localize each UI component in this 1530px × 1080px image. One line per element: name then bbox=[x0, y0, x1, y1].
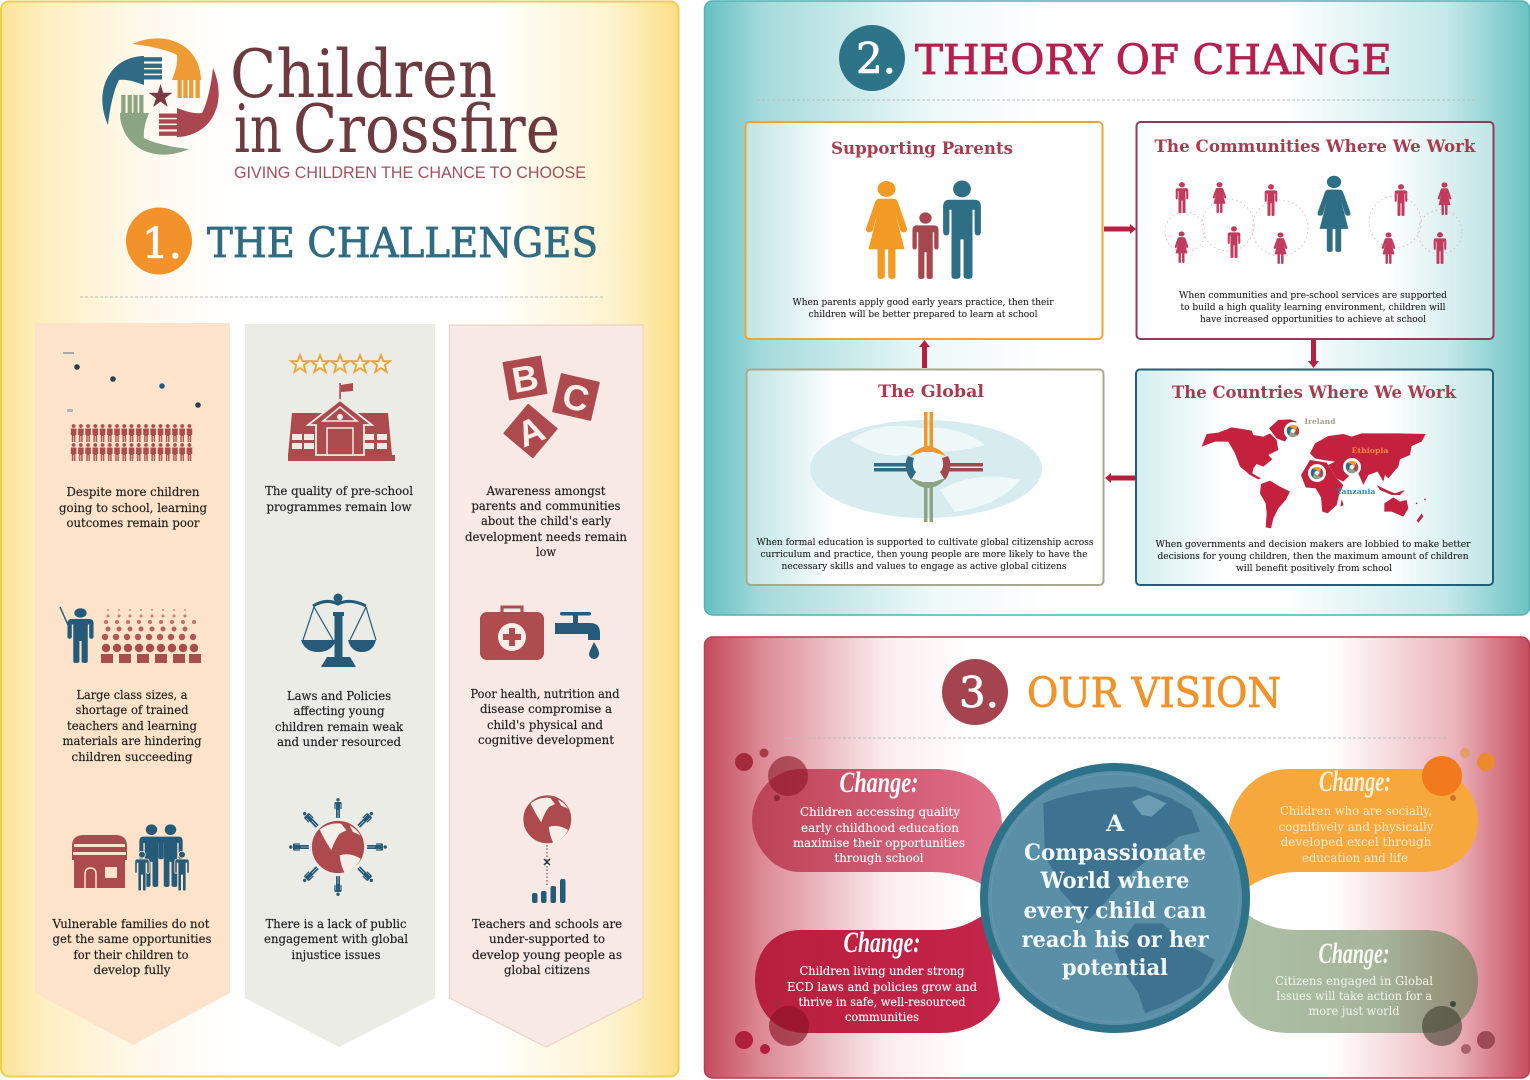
text: awareness: Awareness amongst bbox=[486, 484, 606, 498]
text: learning outcomes: Despite more children bbox=[66, 485, 200, 499]
icon: five stars bbox=[291, 355, 390, 372]
box: communities bbox=[1136, 122, 1494, 339]
column: pink challenges bbox=[450, 325, 643, 1047]
world map with country labels: Tanzania bbox=[1336, 487, 1376, 496]
text: health: disease compromise a bbox=[480, 702, 612, 716]
text: class sizes: Large class sizes, a bbox=[76, 688, 188, 702]
change bubble: child development: Change: bbox=[1319, 765, 1391, 798]
central vision globe: every child can bbox=[1024, 898, 1206, 924]
text: awareness: parents and communities bbox=[472, 499, 620, 513]
change bubble: laws and policies: Change: bbox=[844, 926, 920, 959]
heading: 3. our vision: OUR VISION bbox=[1027, 669, 1281, 717]
icon: school building bbox=[288, 383, 395, 461]
box: countries: decisions for young children, then the maximum amount of children bbox=[1158, 551, 1468, 562]
arrow: communities to countries bbox=[1308, 340, 1319, 368]
world map with country labels: Ethiopia bbox=[1352, 446, 1389, 455]
text: vulnerable families: get the same opportunities bbox=[52, 932, 212, 946]
text: awareness: development needs remain bbox=[465, 530, 627, 544]
column: grey challenges bbox=[245, 324, 435, 1047]
change bubble: global issues: Issues will take action for a bbox=[1276, 989, 1432, 1003]
text: laws and policies: children remain weak bbox=[275, 720, 404, 734]
text: learning outcomes bbox=[59, 485, 207, 530]
arrow: parents to communities bbox=[1104, 224, 1136, 234]
text: learning outcomes: going to school, learning bbox=[59, 501, 207, 515]
logo: Children in Crossfire: in bbox=[234, 91, 282, 168]
panel: our vision bbox=[704, 637, 1530, 1078]
icon: four hands and star bbox=[102, 38, 219, 155]
icon: community network bbox=[1165, 176, 1462, 264]
central vision globe: Compassionate bbox=[1024, 840, 1206, 866]
heading: 1. the challenges: 1. bbox=[142, 219, 182, 268]
icon: crowd of children bbox=[63, 352, 201, 461]
change bubble: laws and policies: communities bbox=[845, 1010, 919, 1024]
text: learning outcomes: outcomes remain poor bbox=[66, 516, 200, 530]
icon: scales of justice bbox=[301, 594, 376, 667]
box: the global bbox=[746, 370, 1104, 585]
icon: medical kit and tap bbox=[480, 607, 600, 660]
text: awareness bbox=[465, 484, 627, 559]
heading: 3. our vision: 3. bbox=[959, 668, 999, 717]
box: communities: When communities and pre-school services are supported bbox=[1179, 290, 1447, 301]
change bubble: laws and policies bbox=[735, 914, 1000, 1054]
change bubble: early childhood education: maximise their opportunities bbox=[793, 836, 965, 850]
box: the global: curriculum and practice, then young people are more likely to have the bbox=[760, 549, 1088, 560]
text: vulnerable families: develop fully bbox=[94, 963, 171, 977]
logo: Children in Crossfire bbox=[102, 36, 586, 182]
text: health: Poor health, nutrition and bbox=[470, 687, 620, 701]
text: global citizens bbox=[472, 917, 622, 977]
world map with country labels bbox=[1202, 417, 1426, 528]
text: public engagement bbox=[264, 917, 408, 962]
text: laws and policies bbox=[275, 689, 404, 749]
icon: alphabet blocks: B bbox=[509, 356, 541, 401]
icon: alphabet blocks bbox=[502, 355, 600, 458]
change bubble: global issues: Change: bbox=[1318, 937, 1390, 970]
box: supporting parents bbox=[746, 122, 1102, 339]
heading: 1. the challenges bbox=[126, 208, 598, 274]
text: pre-school quality: programmes remain low bbox=[266, 500, 412, 514]
arrow: global to parents bbox=[919, 340, 930, 368]
icon: globe and bar chart bbox=[523, 795, 572, 903]
text: awareness: low bbox=[536, 545, 557, 559]
central vision globe bbox=[984, 767, 1246, 1029]
central vision globe: reach his or her bbox=[1022, 927, 1209, 953]
text: laws and policies: Laws and Policies bbox=[287, 689, 391, 703]
text: public engagement: There is a lack of public bbox=[266, 917, 407, 931]
icon: alphabet blocks: A bbox=[511, 408, 550, 455]
change bubble: child development: education and life bbox=[1302, 851, 1408, 865]
box: countries: When governments and decision makers are lobbied to make better bbox=[1156, 539, 1471, 550]
change bubble: laws and policies: Children living under strong bbox=[800, 964, 965, 978]
heading: 2. theory of change: THEORY OF CHANGE bbox=[915, 36, 1392, 84]
box: supporting parents: children will be better prepared to learn at school bbox=[808, 309, 1038, 320]
change bubble: child development: cognitively and physically bbox=[1278, 820, 1434, 834]
heading: 2. theory of change: 2. bbox=[856, 34, 896, 83]
central vision globe: World where bbox=[1040, 868, 1190, 894]
change bubble: laws and policies: thrive in safe, well-resourced bbox=[798, 995, 966, 1009]
icon: globe with people bbox=[289, 798, 387, 896]
text: vulnerable families bbox=[52, 917, 212, 977]
text: health: cognitive development bbox=[478, 733, 614, 747]
change bubble: child development: developed excel through bbox=[1280, 835, 1432, 849]
text: vulnerable families: Vulnerable families do not bbox=[52, 917, 210, 931]
arrow: countries to global bbox=[1105, 473, 1135, 483]
change bubble: child development: Children who are socially, bbox=[1280, 804, 1432, 818]
panel: theory of change bbox=[704, 1, 1530, 615]
change bubble: early childhood education: early childhood education bbox=[801, 821, 959, 835]
icon: alphabet blocks: C bbox=[559, 375, 593, 420]
box: the global: When formal education is supported to cultivate global citizenship across bbox=[756, 537, 1094, 548]
text: public engagement: engagement with global bbox=[264, 932, 408, 946]
text: global citizens: Teachers and schools are bbox=[472, 917, 622, 931]
heading: 3. our vision bbox=[942, 659, 1281, 725]
box: communities: have increased opportunities to achieve at school bbox=[1200, 314, 1426, 325]
change bubble: global issues bbox=[1228, 914, 1495, 1054]
box: countries: will benefit positively from school bbox=[1236, 563, 1392, 574]
text: global citizens: global citizens bbox=[504, 963, 590, 977]
icon: house and family bbox=[72, 824, 189, 891]
panel: the challenges bbox=[1, 2, 678, 1076]
text: global citizens: develop young people as bbox=[472, 948, 622, 962]
text: global citizens: under-supported to bbox=[489, 932, 605, 946]
change bubble: laws and policies: ECD laws and policies grow and bbox=[787, 980, 977, 994]
logo: Children in Crossfire: GIVING CHILDREN THE CHANCE TO CHOOSE bbox=[234, 164, 586, 182]
change bubble: global issues: more just world bbox=[1308, 1004, 1400, 1018]
icon: global hands on globe bbox=[810, 412, 1042, 522]
change bubble: child development bbox=[1228, 748, 1495, 888]
box: countries bbox=[1136, 370, 1493, 585]
text: class sizes: teachers and learning bbox=[67, 719, 197, 733]
change bubble: early childhood education: Children accessing quality bbox=[800, 805, 960, 819]
change bubble: early childhood education: through school bbox=[834, 851, 924, 865]
change bubble: global issues: Citizens engaged in Global bbox=[1275, 974, 1433, 988]
world map with country labels: Ireland bbox=[1304, 417, 1336, 426]
text: vulnerable families: for their children to bbox=[74, 948, 188, 962]
box: the global: The Global bbox=[878, 382, 985, 402]
text: class sizes: materials are hindering bbox=[62, 734, 202, 748]
logo: Children in Crossfire: Crossfire bbox=[293, 91, 560, 168]
text: pre-school quality: The quality of pre-school bbox=[265, 484, 413, 498]
box: communities: to build a high quality learning environment, children will bbox=[1180, 302, 1446, 313]
central vision globe: potential bbox=[1062, 955, 1168, 981]
box: communities: The Communities Where We Work bbox=[1154, 137, 1477, 157]
box: the global: necessary skills and values to engage as active global citizens bbox=[782, 561, 1067, 572]
box: countries: The Countries Where We Work bbox=[1172, 383, 1457, 403]
heading: 1. the challenges: THE CHALLENGES bbox=[207, 219, 598, 267]
text: laws and policies: affecting young bbox=[294, 704, 385, 718]
text: class sizes: shortage of trained bbox=[76, 703, 189, 717]
box: supporting parents: Supporting Parents bbox=[831, 139, 1013, 159]
change bubble: early childhood education bbox=[735, 748, 1002, 886]
text: pre-school quality bbox=[265, 484, 413, 514]
text: public engagement: injustice issues bbox=[292, 948, 380, 962]
text: health: child's physical and bbox=[487, 718, 603, 732]
column: peach challenges bbox=[35, 323, 230, 1045]
heading: 2. theory of change bbox=[839, 25, 1392, 91]
icon: teacher and large class bbox=[60, 607, 201, 663]
change bubble: early childhood education: Change: bbox=[840, 766, 918, 799]
text: class sizes bbox=[62, 688, 202, 764]
text: health bbox=[470, 687, 620, 747]
text: laws and policies: and under resourced bbox=[277, 735, 401, 749]
box: supporting parents: When parents apply good early years practice, then their bbox=[792, 297, 1054, 308]
text: awareness: about the child's early bbox=[481, 514, 611, 528]
text: class sizes: children succeeding bbox=[72, 750, 193, 764]
logo: Children in Crossfire: Children bbox=[230, 36, 497, 113]
central vision globe: A bbox=[1105, 811, 1125, 837]
icon: family of three bbox=[866, 180, 981, 279]
